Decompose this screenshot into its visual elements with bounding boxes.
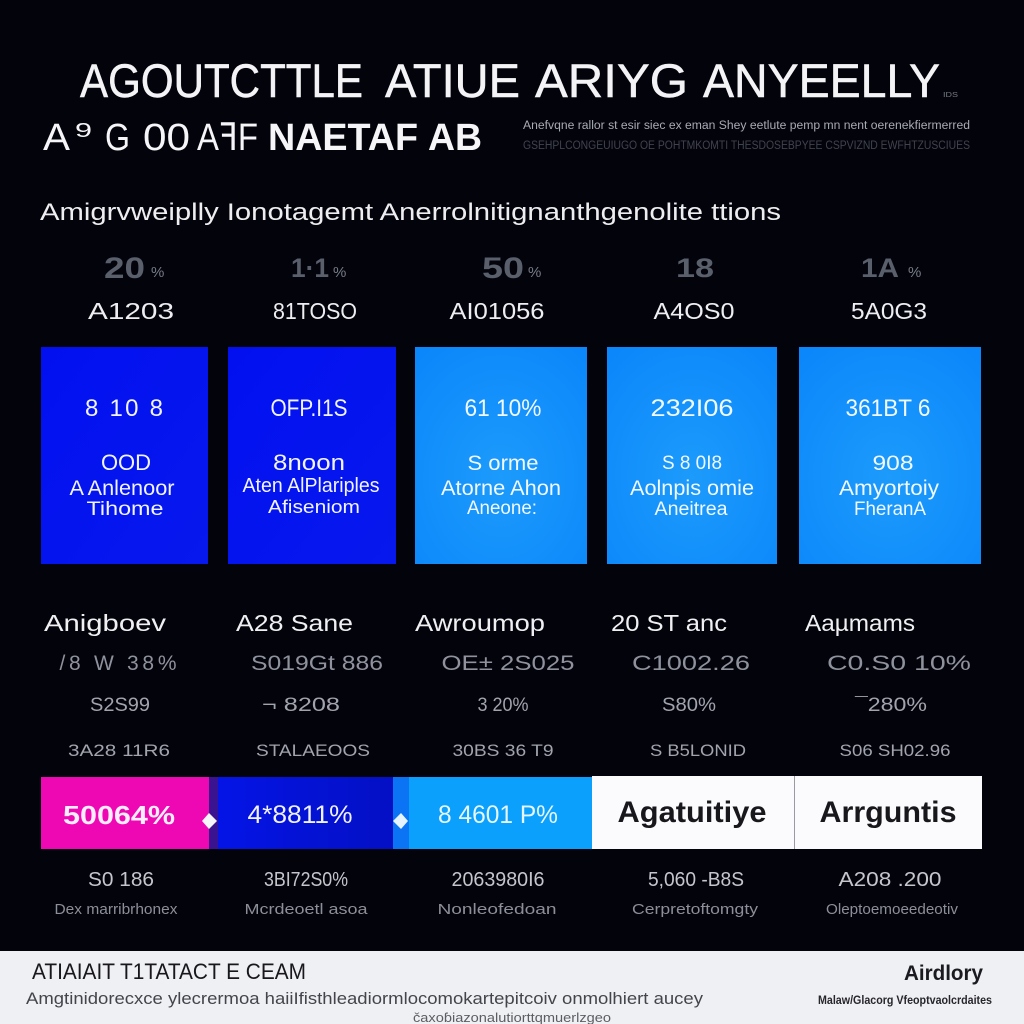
metrics row three: S B5LONID	[650, 741, 746, 760]
column headings	[44, 610, 915, 636]
card 4: 232I06	[650, 395, 734, 422]
subtitle: G	[105, 117, 130, 159]
footer heading: ATIAIAIT T1TATACT E CEAM	[32, 959, 306, 984]
metrics row one: C1002.26	[632, 652, 750, 675]
bar value row: A208 .200	[838, 869, 942, 891]
code labels row: A4OS0	[654, 298, 734, 324]
intro text block	[523, 120, 970, 152]
segment value: sky: 8 4601 P%	[438, 801, 558, 829]
top percentage row: %	[333, 264, 346, 281]
code labels row: 81TOSO	[273, 298, 357, 324]
metrics row three	[68, 741, 950, 760]
title: ARIYG	[535, 54, 688, 107]
bar caption row: Nonleofedoan	[438, 901, 556, 918]
card 3	[415, 347, 587, 564]
section heading: Amigrvweiplly Ionotagemt Anerrolnitignanthgenolite ttions	[40, 199, 781, 226]
column headings: Awroumop	[415, 610, 545, 636]
column headings: Aaµmams	[805, 610, 915, 636]
card 1	[41, 347, 208, 564]
card 2	[228, 347, 396, 564]
bar caption row: Mcrdeoetl asoa	[244, 901, 368, 918]
footer body text: Amgtinidorecxce ylecrermoa haiiIfisthleadiormlocomokartepitcoiv onmolhiert aucey	[26, 990, 704, 1008]
card 3: S orme	[468, 452, 538, 475]
top percentage row: %	[908, 264, 921, 281]
footer panel	[0, 951, 1024, 1024]
footer brand caption: Malaw/Glacorg Vfeoptvaolcrdaites	[818, 995, 992, 1007]
metrics row two: S2S99	[90, 695, 150, 716]
bar caption row	[54, 901, 958, 918]
intro text block: Anefvqne rallor st esir siec ex eman Shey eetlute pemp mn nent oerenekfiermerred	[523, 120, 970, 132]
icon: diamond marker two	[393, 813, 408, 829]
column headings: Anigboev	[44, 610, 167, 636]
metrics row three: STALAEOOS	[256, 741, 370, 760]
subtitle: AB	[428, 117, 482, 159]
top percentage row: 1A	[861, 253, 899, 283]
card 4: Aneitrea	[654, 499, 728, 520]
code labels row	[88, 298, 927, 324]
footer brand: Airdlory	[904, 962, 983, 985]
card 2: Afiseniom	[268, 497, 360, 517]
metrics row one	[60, 652, 971, 675]
card 4: Aolnpis omie	[630, 477, 754, 500]
title: ANYEELLY	[703, 54, 940, 107]
top percentage row: 50	[482, 252, 524, 285]
top percentage row: %	[151, 264, 164, 281]
metrics row one: S019Gt 886	[251, 652, 383, 675]
card 3: Atorne Ahon	[441, 477, 561, 500]
top percentage row	[104, 252, 921, 285]
title: IDS	[943, 92, 958, 99]
metrics row two: S80%	[662, 695, 716, 716]
metrics row three: 30BS 36 T9	[452, 741, 554, 760]
bar value row	[88, 869, 942, 891]
segment label: white two: Arrguntis	[820, 796, 956, 829]
code labels row: 5A0G3	[851, 298, 927, 324]
column headings: A28 Sane	[236, 610, 353, 636]
intro text block: GSEHPLCONGEUIUGO OE POHTMKOMTI THESDOSEBPYEE CSPVIZND EWFHTZUSCIUES	[523, 140, 970, 152]
metrics row two: ¬ 8208	[262, 695, 340, 716]
segmented bar	[41, 776, 982, 849]
card 1: Tihome	[86, 499, 164, 520]
card 2: 8noon	[273, 450, 345, 475]
metrics row two: ¯280%	[854, 695, 927, 716]
top percentage row: 1·1	[291, 253, 329, 283]
card 2: Aten AlPlariples	[242, 475, 380, 497]
metrics row one: OE± 2S025	[442, 652, 574, 675]
bar caption row: Cerpretoftomgty	[632, 901, 759, 918]
card 3: 61 10%	[464, 395, 542, 422]
top percentage row: %	[528, 264, 541, 281]
bar caption row: Dex marribrhonex	[54, 901, 178, 918]
subtitle: A	[43, 117, 71, 159]
bar value row: 2063980I6	[452, 869, 544, 891]
metrics row two: 3 20%	[478, 695, 529, 716]
card 5: FheranA	[854, 499, 926, 520]
metrics row two	[90, 695, 927, 716]
bar value row: 3BI72S0%	[264, 869, 348, 891]
title: ATIUE	[385, 54, 520, 107]
subtitle: AꟻF	[197, 117, 258, 159]
subtitle: 9	[75, 120, 92, 142]
card 5: 908	[872, 452, 914, 475]
card 1: 8 10 8	[85, 395, 163, 422]
title	[80, 54, 958, 107]
card 4	[607, 347, 777, 564]
card 5	[799, 347, 981, 564]
column headings: 20 ST anc	[611, 610, 727, 636]
top percentage row: 18	[676, 253, 714, 283]
subtitle: 00	[143, 117, 190, 159]
metrics row one: /8 W 38%	[60, 652, 176, 675]
segment label: white one: Agatuitiye	[618, 796, 766, 829]
card 5: Amyortoiy	[839, 477, 940, 500]
icon: diamond marker one	[202, 813, 217, 829]
code labels row: AI01056	[450, 298, 544, 324]
metrics row three: 3A28 11R6	[68, 741, 170, 760]
subtitle: NAETAF	[268, 117, 418, 159]
metrics row one: C0.S0 10%	[827, 652, 971, 675]
code labels row: A1203	[88, 298, 174, 324]
top percentage row: 20	[104, 252, 145, 285]
card 3: Aneone:	[467, 498, 537, 519]
segment value: blue: 4*8811%	[248, 801, 352, 829]
card 5: 361BT 6	[846, 395, 930, 422]
bar caption row: Oleptoemoeedeotiv	[826, 901, 958, 918]
segment value: magenta: 50064%	[63, 800, 175, 830]
bar value row: 5,060 -B8S	[648, 869, 744, 891]
card 1: OOD	[101, 450, 151, 475]
card 4: S 8 0I8	[662, 453, 722, 474]
bar value row: S0 186	[88, 869, 154, 891]
metrics row three: S06 SH02.96	[840, 741, 950, 760]
subtitle	[43, 117, 482, 159]
card 2: OFP.I1S	[270, 395, 348, 422]
title: AGOUTCTTLE	[80, 54, 363, 107]
card 1: A Anlenoor	[70, 477, 174, 500]
